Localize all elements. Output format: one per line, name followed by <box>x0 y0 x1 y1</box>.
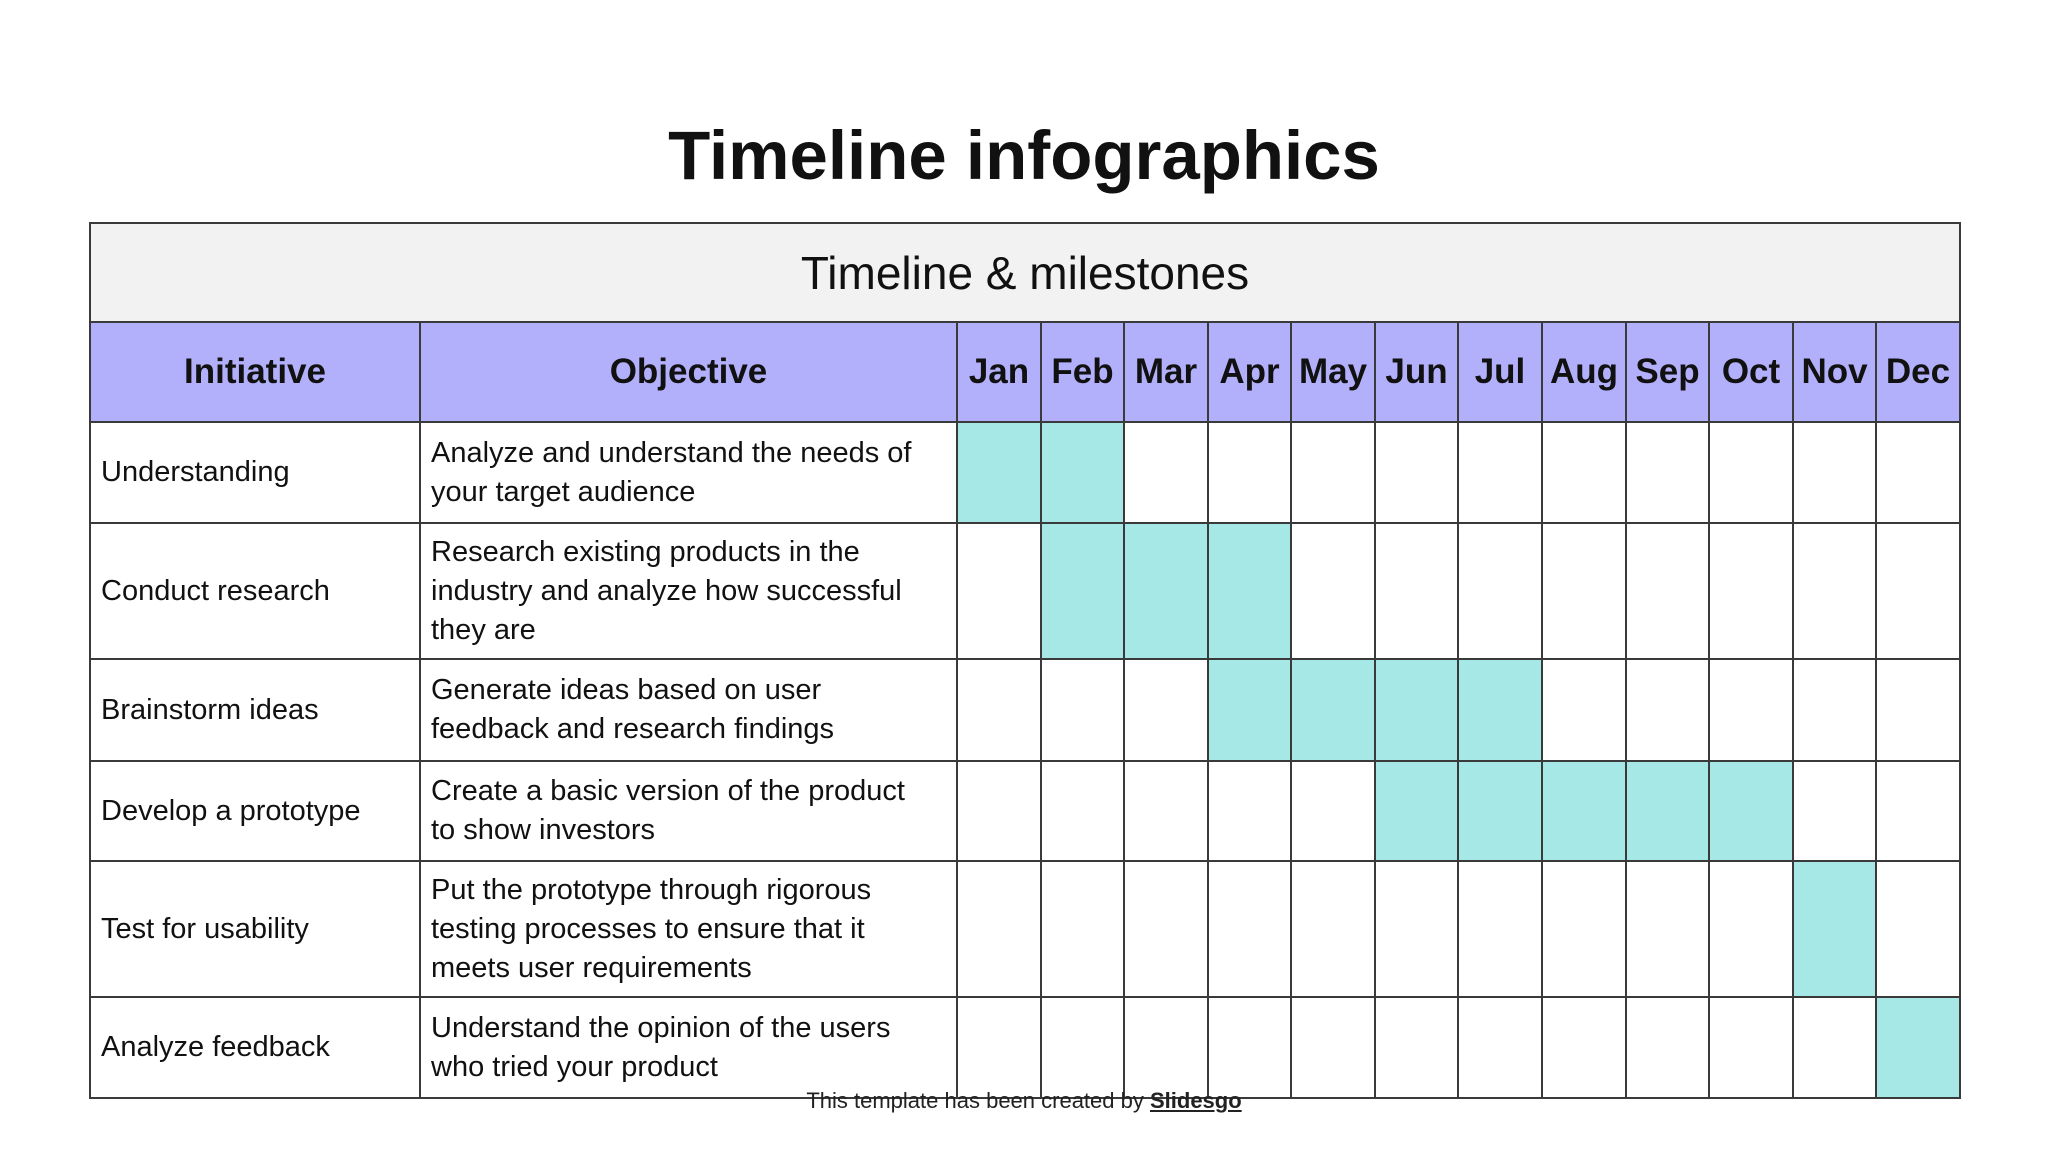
timeline table: Research existing products in the industry and analyze how successful they are <box>431 536 902 646</box>
timeline table: Test for usability <box>101 912 309 944</box>
timeline table: Create a basic version of the product to show investors <box>431 775 905 846</box>
timeline table: Analyze and understand the needs of your target audience <box>431 436 911 508</box>
timeline table: Oct <box>1722 352 1780 391</box>
timeline table: Put the prototype through rigorous testing processes to ensure that it meets user requirements <box>431 874 871 984</box>
timeline table: Sep <box>1635 352 1700 391</box>
timeline table: Analyze feedback <box>101 1031 330 1063</box>
timeline table: Aug <box>1550 352 1618 391</box>
timeline table: Understand the opinion of the users who tried your product <box>431 1012 890 1082</box>
timeline table: Conduct research <box>101 574 330 606</box>
timeline table: Apr <box>1219 352 1280 391</box>
timeline table: Objective <box>610 352 767 391</box>
timeline table: Brainstorm ideas <box>101 694 319 726</box>
timeline table: Nov <box>1801 352 1868 391</box>
timeline table: Understanding <box>101 456 290 488</box>
timeline table: Develop a prototype <box>101 794 361 826</box>
timeline table: Dec <box>1886 352 1950 391</box>
footer credit: This template has been created by Slidesgo <box>806 1088 1242 1113</box>
timeline table: Jul <box>1475 352 1525 391</box>
timeline table: Feb <box>1051 352 1114 391</box>
timeline table: Jan <box>969 352 1029 391</box>
timeline table: Mar <box>1135 352 1197 391</box>
timeline table: Initiative <box>184 352 326 391</box>
timeline table: Timeline & milestones <box>801 246 1249 298</box>
title: Timeline infographics <box>668 117 1380 194</box>
timeline table: Generate ideas based on user feedback and research findings <box>431 674 834 745</box>
timeline table: May <box>1299 352 1367 391</box>
timeline table: Jun <box>1385 352 1448 391</box>
timeline table <box>89 222 1961 1099</box>
